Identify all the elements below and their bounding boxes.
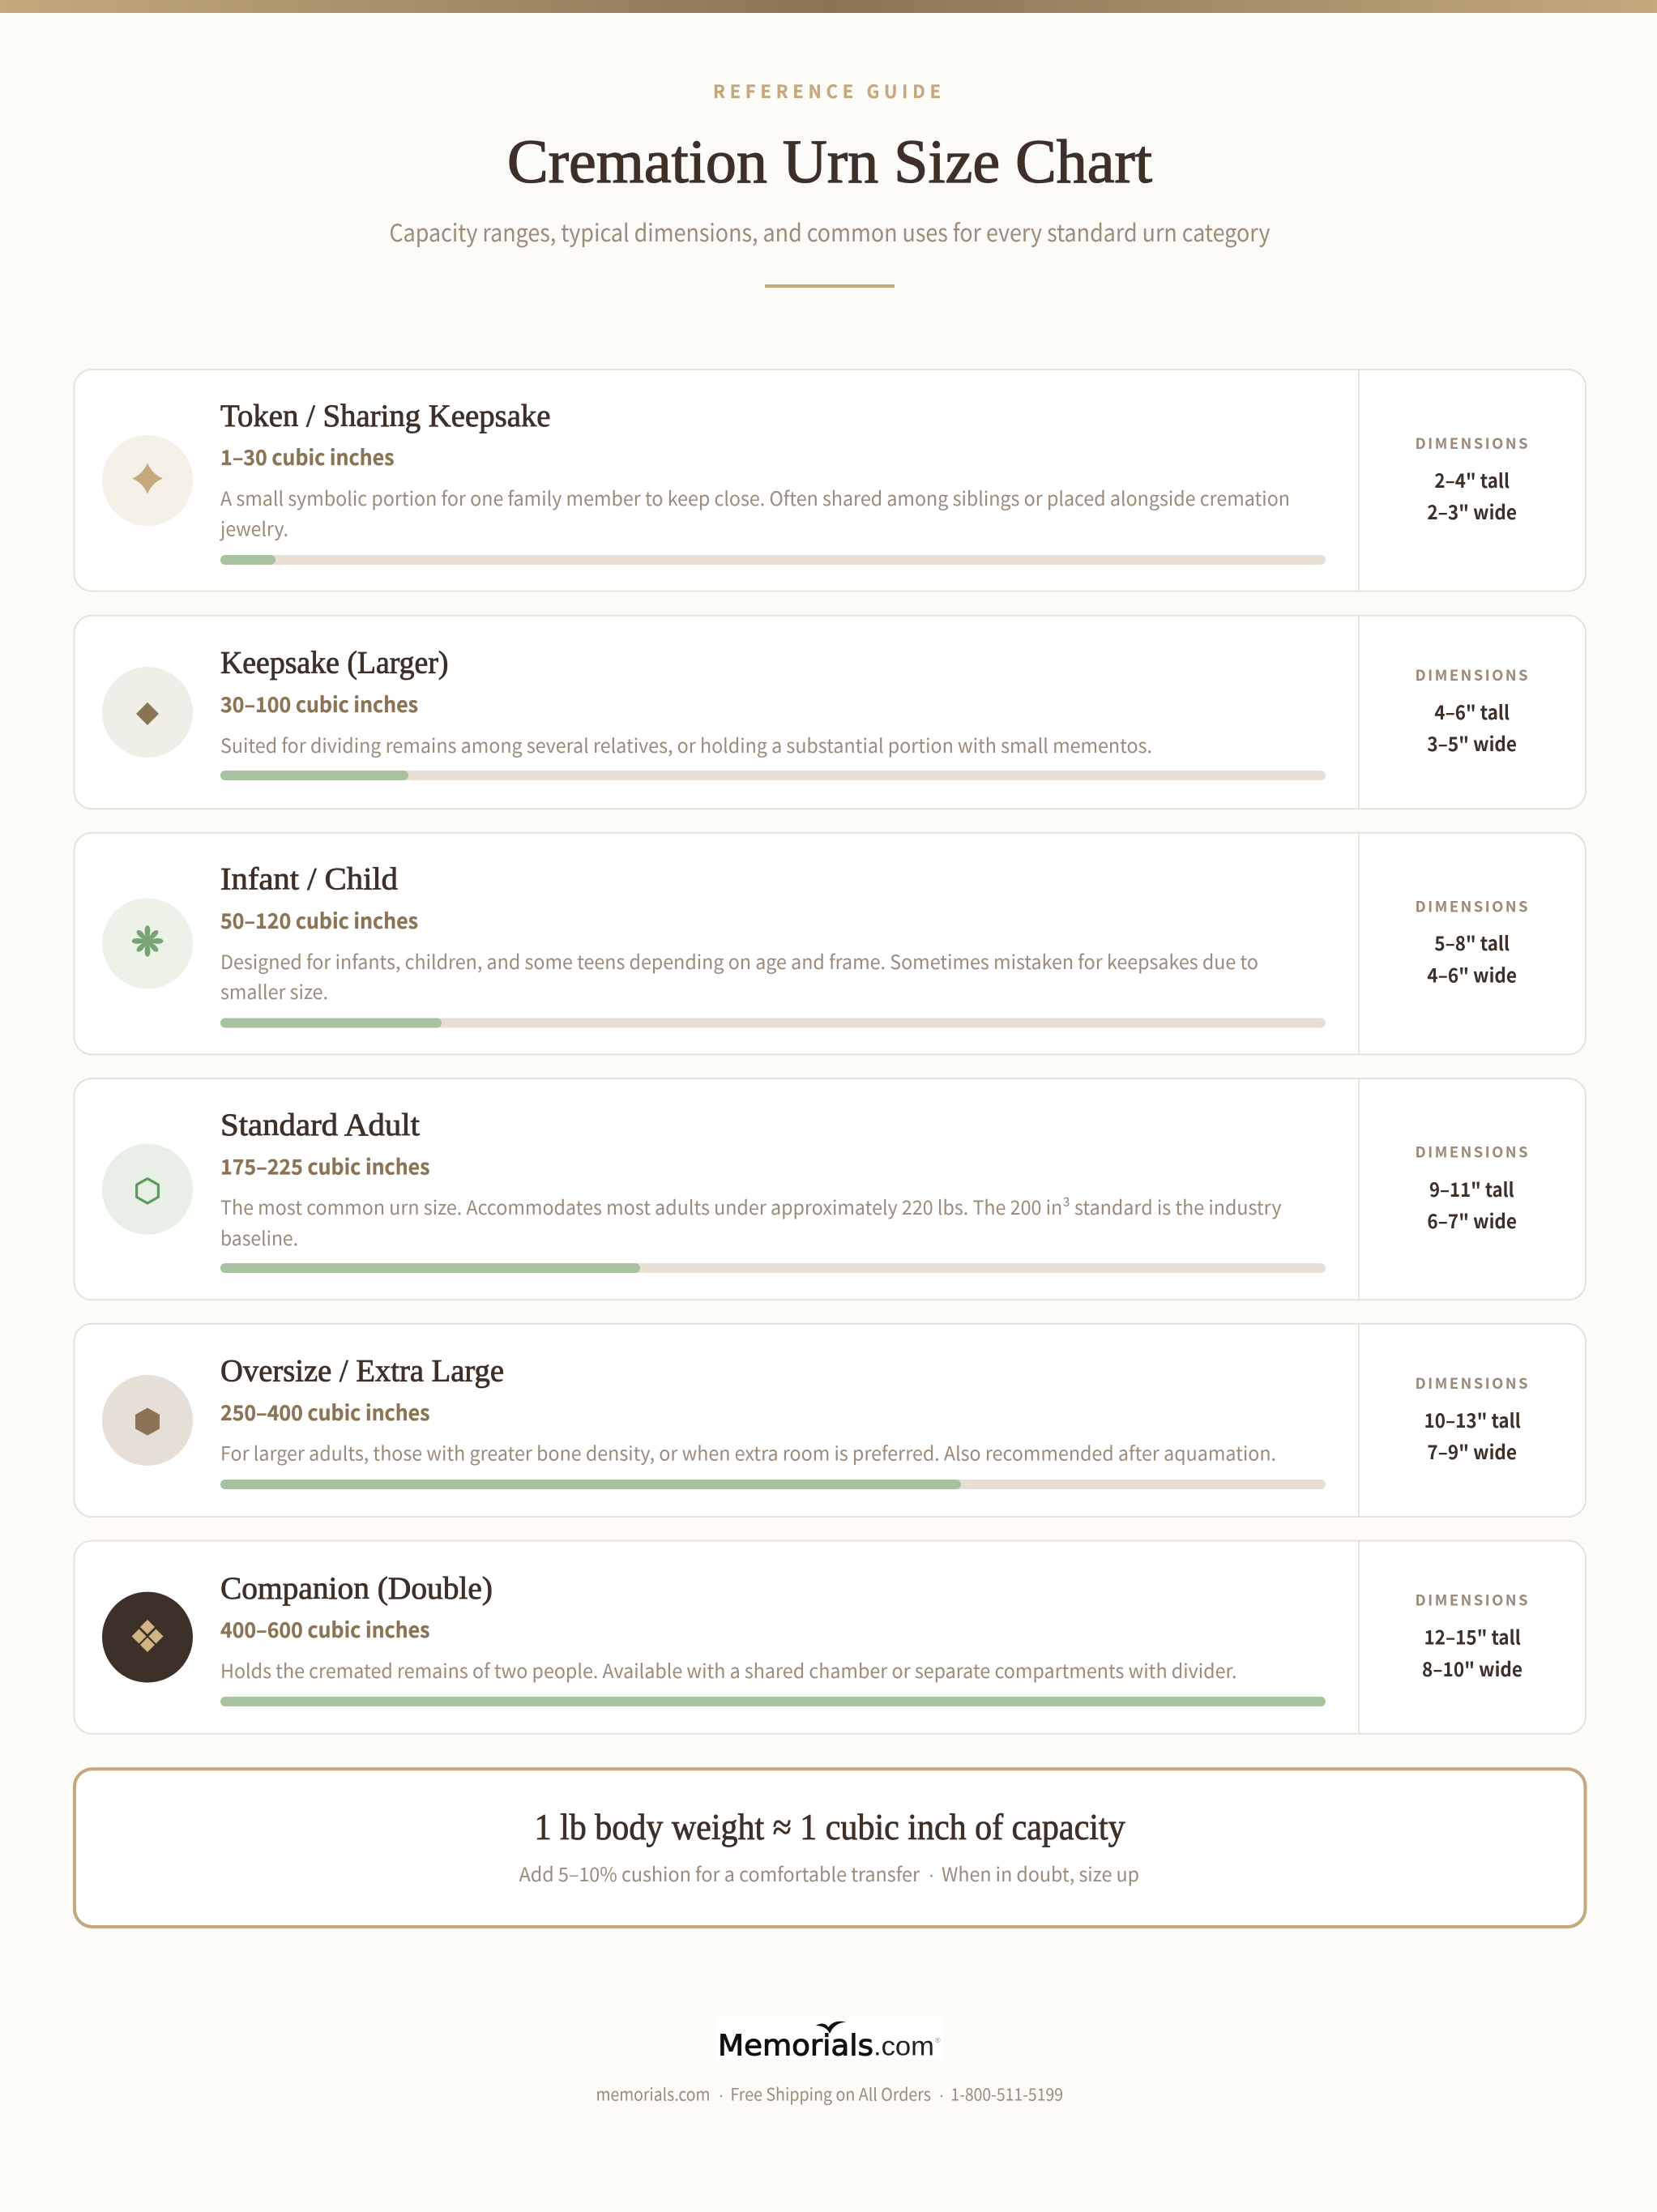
description: The most common urn size. Accommodates most adults under approximately 220 lbs. The 200 in³ standard is the industry: [220, 1192, 1282, 1220]
dimensions: 2–3" wide: [1427, 497, 1517, 525]
dimensions: 8–10" wide: [1422, 1654, 1522, 1682]
footer contact line: [596, 2082, 1063, 2107]
category name: Standard Adult: [220, 1108, 420, 1142]
description: Suited for dividing remains among several relatives, or holding a substantial portion with small mementos.: [220, 730, 1152, 758]
footer contact line: memorials.com: [596, 2082, 710, 2107]
icon: diamond: [102, 667, 193, 758]
description: Holds the cremated remains of two people. Available with a shared chamber or separate compartments with divider.: [220, 1655, 1236, 1684]
description line 2: jewelry.: [219, 514, 288, 541]
footer contact line: ·: [938, 2086, 945, 2105]
description line 2: baseline.: [220, 1223, 298, 1251]
icon: four-point star: [102, 435, 193, 526]
icon: eight-petal florette: [102, 898, 193, 989]
capacity bar: [220, 1263, 1326, 1273]
dimensions: DIMENSIONS: [1415, 1142, 1528, 1163]
callout note: When in doubt, size up: [942, 1859, 1139, 1887]
icon: hexagon outline: [102, 1144, 193, 1235]
capacity range: 30–100 cubic inches: [220, 689, 418, 719]
icon: solid hexagon: [102, 1375, 193, 1466]
panel: Keepsake (Larger): [75, 616, 1586, 809]
panel: Token / Sharing Keepsake: [75, 369, 1586, 591]
subtitle: Capacity ranges, typical dimensions, and common uses for every standard urn category: [389, 215, 1271, 249]
dimensions: DIMENSIONS: [1415, 1590, 1528, 1611]
category name: Infant / Child: [220, 862, 399, 896]
header: [389, 78, 1271, 288]
capacity bar: [220, 1697, 1326, 1706]
header divider: [765, 284, 895, 288]
category name: Token / Sharing Keepsake: [220, 399, 551, 433]
callout: sizing rule of thumb: [75, 1769, 1585, 1927]
capacity range: 250–400 cubic inches: [220, 1397, 429, 1427]
capacity bar: [220, 1018, 1326, 1027]
dimensions: DIMENSIONS: [1415, 664, 1528, 685]
footer contact line: Free Shipping on All Orders: [730, 2082, 931, 2107]
description line 2: smaller size.: [220, 976, 328, 1005]
dimensions: [1415, 664, 1528, 757]
dimensions: DIMENSIONS: [1415, 1373, 1528, 1394]
panel: Infant / Child: [75, 833, 1586, 1054]
description: For larger adults, those with greater bone density, or when extra room is preferred. Also recommended after aquamation.: [220, 1437, 1276, 1467]
logo: Memorials.com: ®: [935, 2036, 941, 2044]
dimensions: [1415, 1373, 1528, 1465]
footer contact line: ·: [718, 2086, 724, 2105]
dimensions: 9–11" tall: [1429, 1174, 1514, 1202]
panel: Standard Adult: [75, 1078, 1586, 1300]
capacity range: 175–225 cubic inches: [220, 1151, 429, 1181]
top gradient band: [0, 0, 1657, 13]
eyebrow label: REFERENCE GUIDE: [713, 78, 941, 104]
logo: Memorials.com: [715, 2017, 943, 2063]
panel: Companion (Double): [75, 1541, 1586, 1734]
callout note: Add 5–10% cushion for a comfortable transfer: [519, 1859, 920, 1887]
dimensions: 4–6" tall: [1434, 697, 1510, 725]
dimensions: 4–6" wide: [1427, 959, 1517, 988]
dimensions: DIMENSIONS: [1415, 896, 1528, 917]
callout note: ·: [929, 1864, 935, 1886]
dimensions: 5–8" tall: [1434, 928, 1510, 956]
footer contact line: 1-800-511-5199: [950, 2082, 1063, 2107]
dimensions: 10–13" tall: [1424, 1405, 1521, 1433]
capacity bar: [220, 555, 1326, 565]
callout note: [519, 1859, 1139, 1887]
dimensions: DIMENSIONS: [1415, 433, 1528, 454]
logo: Memorials.com: .com: [873, 2031, 934, 2061]
panel: Oversize / Extra Large: [75, 1324, 1586, 1517]
title: Cremation Urn Size Chart: [507, 128, 1152, 196]
dimensions: 7–9" wide: [1427, 1437, 1517, 1465]
logo: Memorials.com: Memorials: [718, 2030, 873, 2063]
category name: Companion (Double): [220, 1571, 493, 1606]
dimensions: [1415, 896, 1528, 988]
icon: four diamonds: [102, 1592, 193, 1683]
capacity range: 1–30 cubic inches: [220, 442, 394, 472]
description: Designed for infants, children, and some teens depending on age and frame. Sometimes mistaken for keepsakes due to: [220, 946, 1258, 975]
capacity bar: [220, 771, 1326, 780]
dimensions: 6–7" wide: [1427, 1206, 1517, 1234]
description: A small symbolic portion for one family member to keep close. Often shared among siblings or placed alongside cremation: [220, 483, 1290, 511]
dimensions: [1415, 1590, 1528, 1682]
category name: Oversize / Extra Large: [220, 1353, 504, 1389]
capacity range: 400–600 cubic inches: [220, 1614, 429, 1644]
dimensions: [1415, 433, 1528, 525]
capacity range: 50–120 cubic inches: [220, 905, 418, 935]
category name: Keepsake (Larger): [220, 645, 449, 681]
dimensions: 3–5" wide: [1427, 728, 1517, 757]
dimensions: 2–4" tall: [1434, 465, 1510, 493]
dimensions: 12–15" tall: [1424, 1622, 1521, 1650]
capacity bar: [220, 1480, 1326, 1489]
dimensions: [1415, 1142, 1528, 1234]
callout headline: 1 lb body weight ≈ 1 cubic inch of capacity: [535, 1807, 1125, 1847]
